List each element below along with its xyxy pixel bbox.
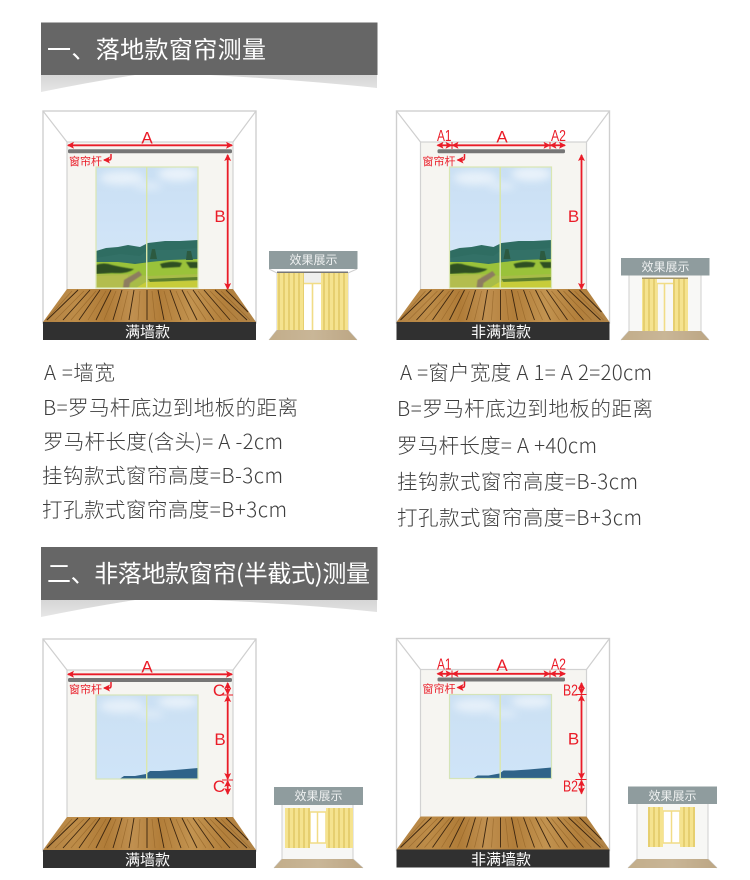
- window with landscape: [96, 695, 198, 780]
- dimension A arrow: A: [141, 658, 153, 676]
- wooden floor and label band: [43, 289, 256, 340]
- dimension A, A1, A2 arrows: A2: [551, 656, 566, 674]
- heading: section two: 二、非落地款窗帘(半截式)测量: [47, 554, 370, 589]
- heading: section one: [41, 22, 378, 92]
- dimension A, A1, A2 arrows: A2: [551, 128, 566, 145]
- dimension B arrow: B: [214, 207, 226, 226]
- dimension A, A1, A2 arrows: [437, 656, 566, 678]
- text block: non full wall formulas: B=罗马杆底边到地板的距离: [397, 392, 653, 422]
- rod callout: 窗帘杆: [69, 681, 102, 697]
- dimensions B and C arrows: C: [213, 681, 225, 700]
- dimensions B and B2 arrows: B: [568, 730, 579, 748]
- dimension A, A1, A2 arrows: A: [496, 656, 508, 675]
- thumbnail: effect non full wall: 效果展示: [641, 258, 690, 275]
- dimensions B and B2 arrows: [563, 682, 586, 796]
- text block: non full wall formulas: [397, 356, 653, 531]
- text block: full wall formulas: 挂钩款式窗帘高度=B-3cm: [42, 459, 283, 489]
- dimensions B and B2 arrows: B2: [563, 682, 578, 700]
- panel: non full-wall floor-length room: [396, 111, 610, 342]
- dimension B arrow: [568, 155, 582, 289]
- label: 满墙款: 满墙款: [125, 849, 170, 870]
- dimension A, A1, A2 arrows: [437, 128, 566, 149]
- thumbnail: effect full wall: [269, 251, 358, 340]
- window with landscape: [96, 167, 198, 288]
- dimension A, A1, A2 arrows: A: [496, 128, 508, 146]
- window with landscape: [450, 694, 552, 780]
- dimensions B and C arrows: B: [214, 730, 226, 749]
- panel: full-wall floor-length room: [43, 111, 256, 342]
- dimension B arrow: B: [568, 207, 579, 226]
- label: 满墙款: 满墙款: [125, 321, 170, 342]
- thumbnail: effect non full wall: [621, 258, 710, 340]
- curtain rod: [68, 678, 232, 682]
- wooden floor and label band: [396, 289, 610, 340]
- text block: non full wall formulas: A =窗户宽度 A 1= A 2=20cm: [400, 356, 652, 386]
- wooden floor and label band: [396, 816, 610, 868]
- text block: full wall formulas: 罗马杆长度(含头)= A -2cm: [43, 425, 283, 455]
- curtain rod: [438, 678, 565, 682]
- dimensions B and C arrows: C: [213, 777, 225, 796]
- room walls: [396, 111, 610, 323]
- dimension A, A1, A2 arrows: A1: [437, 656, 452, 674]
- thumbnail: effect half-length non full wall: [628, 786, 717, 868]
- dimension B arrow: [214, 155, 228, 289]
- dimensions B and B2 arrows: B2: [563, 778, 578, 796]
- thumbnail: effect half-length non full wall: 效果展示: [648, 787, 697, 804]
- room walls: [396, 638, 610, 850]
- heading: section two: [41, 547, 378, 617]
- dimension A, A1, A2 arrows: A1: [437, 128, 452, 145]
- text block: non full wall formulas: 挂钩款式窗帘高度=B-3cm: [397, 465, 638, 495]
- room walls: [43, 639, 256, 851]
- rod callout: 窗帘杆: [422, 680, 456, 696]
- rod callout: 窗帘杆: [69, 153, 102, 169]
- label: 非满墙款: 非满墙款: [471, 848, 531, 870]
- text block: non full wall formulas: 打孔款式窗帘高度=B+3cm: [397, 501, 642, 531]
- room walls: [43, 111, 256, 323]
- panel: full-wall half-length room: [43, 639, 256, 870]
- wooden floor and label band: [43, 817, 256, 868]
- heading: section one: 一、落地款窗帘测量: [47, 30, 266, 65]
- thumbnail: effect full wall: 效果展示: [289, 251, 338, 268]
- text block: full wall formulas: A =墙宽: [44, 356, 115, 386]
- window with landscape: [450, 167, 552, 288]
- panel: non full-wall half-length room: [396, 638, 610, 870]
- curtain rod: [68, 149, 232, 153]
- text block: full wall formulas: 打孔款式窗帘高度=B+3cm: [42, 493, 287, 523]
- text block: full wall formulas: B=罗马杆底边到地板的距离: [43, 391, 298, 421]
- rod callout: 窗帘杆: [422, 153, 456, 169]
- curtain rod: [438, 149, 565, 153]
- thumbnail: effect half-length full wall: [274, 787, 363, 868]
- label: 非满墙款: 非满墙款: [471, 321, 531, 342]
- dimensions B and C arrows: [213, 681, 233, 796]
- thumbnail: effect half-length full wall: 效果展示: [294, 787, 343, 804]
- dimension A arrow: A: [141, 128, 153, 148]
- text block: non full wall formulas: 罗马杆长度= A +40cm: [397, 429, 597, 459]
- text block: full wall formulas: [42, 356, 298, 523]
